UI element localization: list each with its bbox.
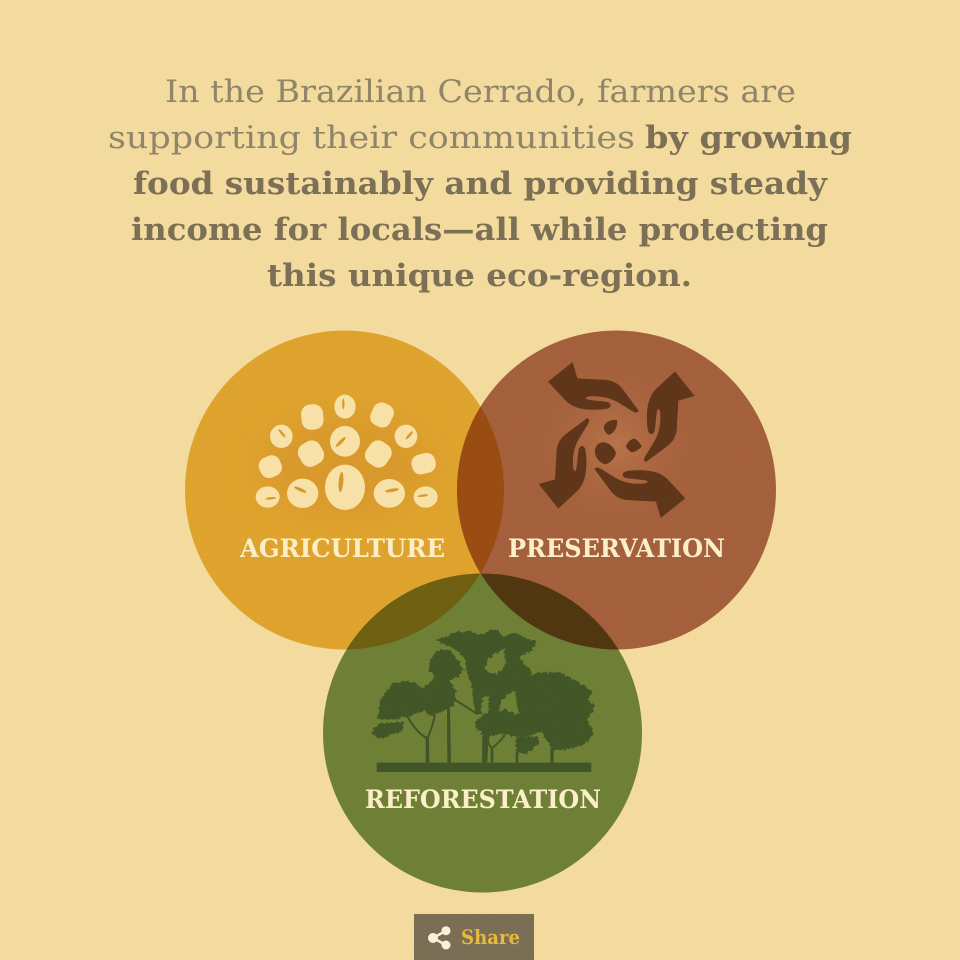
headline text: by growing <box>645 120 852 156</box>
infographic canvas <box>110 78 852 960</box>
overlap: agriculture and preservation <box>457 406 504 574</box>
icon: four hands and seeds <box>539 362 695 518</box>
share button <box>414 914 534 960</box>
icon: seeds <box>256 395 438 510</box>
headline text: income for locals—all while protecting <box>131 212 828 248</box>
headline text <box>108 74 852 294</box>
headline text: food sustainably and providing steady <box>133 166 828 202</box>
panel: preservation circle <box>457 330 776 650</box>
icon: share <box>428 926 450 950</box>
headline text: this unique eco-region. <box>267 258 692 294</box>
panel: agriculture circle <box>185 330 504 650</box>
headline text: supporting their communities <box>108 120 635 156</box>
panel: reforestation circle <box>323 574 642 892</box>
headline text: In the Brazilian Cerrado, farmers are <box>165 74 796 110</box>
label: agriculture: AGRICULTURE <box>239 534 445 563</box>
share button: Share <box>461 925 520 949</box>
icon: tree silhouettes <box>371 629 596 772</box>
label: preservation: PRESERVATION <box>508 534 725 563</box>
overlap: preservation and reforestation <box>480 574 618 650</box>
overlap: agriculture and reforestation <box>346 574 480 650</box>
label: reforestation: REFORESTATION <box>365 785 601 814</box>
